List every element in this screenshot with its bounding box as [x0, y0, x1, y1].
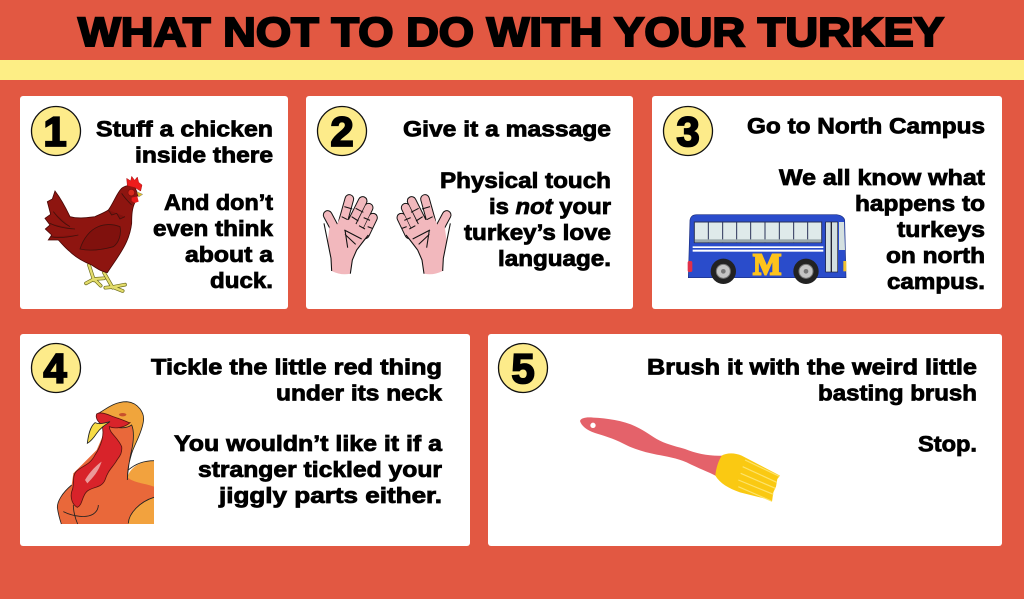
panel 5 text: Stop.	[918, 432, 977, 456]
number badge 3: 3	[676, 108, 700, 155]
panel 5 text	[647, 354, 977, 456]
panel 2 text: is not your	[489, 194, 611, 219]
panel 1 text: inside there	[135, 142, 273, 168]
left hand	[324, 199, 373, 274]
panel 2 text	[403, 116, 611, 271]
title: WHAT NOT TO DO WITH YOUR TURKEY	[78, 9, 944, 55]
panel 1 text: about a	[185, 242, 274, 267]
number badge 1: 1	[43, 108, 67, 155]
panel 5: basting brush	[488, 334, 1002, 546]
panel 5 text: Brush it with the weird little	[647, 354, 977, 380]
number badge 4	[32, 344, 80, 392]
panel 3 text: We all know what	[779, 165, 986, 190]
panel 3 text: campus.	[887, 269, 985, 294]
panel 3 text	[747, 114, 986, 294]
panel 4 text: under its neck	[276, 380, 443, 406]
panel 3: go to north campus	[652, 96, 1002, 309]
number badge 1	[32, 106, 80, 156]
panel 3 text: Go to North Campus	[747, 114, 985, 138]
panel 3 text: turkeys	[897, 217, 985, 242]
panel 1 text: duck.	[210, 268, 273, 293]
icon: basting brush	[580, 417, 780, 502]
panel 3 text: happens to	[855, 191, 985, 216]
icon: turkey	[57, 402, 154, 524]
right hand	[401, 199, 450, 274]
icon: blue Michigan bus: M	[753, 247, 781, 281]
number badge 5: 5	[511, 345, 535, 392]
panel 2 text: Physical touch	[440, 168, 611, 193]
panel 1 text: Stuff a chicken	[96, 116, 273, 142]
panel 4 text: You wouldn’t like it if a	[174, 431, 443, 456]
number badge 3	[664, 106, 712, 156]
panel 2 text: turkey’s love	[464, 220, 611, 245]
panel 1 text	[96, 116, 274, 293]
panel 4: tickle the little red thing	[20, 334, 470, 546]
panel 5 text: basting brush	[818, 380, 977, 406]
icon: blue Michigan bus	[688, 215, 846, 284]
panel 1: stuff a chicken	[20, 96, 288, 309]
number badge 4: 4	[43, 345, 67, 392]
panel 2 text: language.	[498, 246, 611, 271]
yellow banner stripe	[0, 60, 1024, 80]
panel 2 text: Give it a massage	[403, 116, 611, 142]
panel 4 text: stranger tickled your	[198, 457, 442, 482]
number badge 2: 2	[330, 108, 354, 155]
panel 2: give it a massage	[306, 96, 633, 309]
number badge 5	[498, 344, 548, 392]
panel 3 text: on north	[886, 243, 985, 268]
panel 1 text: even think	[153, 216, 274, 241]
panel 1 text: And don’t	[164, 190, 274, 215]
panel 4 text: jiggly parts either.	[218, 483, 442, 508]
panel 4 text	[151, 354, 443, 508]
icon: pair of hands	[324, 199, 450, 274]
number badge 2	[318, 106, 366, 156]
panel 4 text: Tickle the little red thing	[151, 354, 442, 380]
icon: red hen	[45, 176, 143, 291]
